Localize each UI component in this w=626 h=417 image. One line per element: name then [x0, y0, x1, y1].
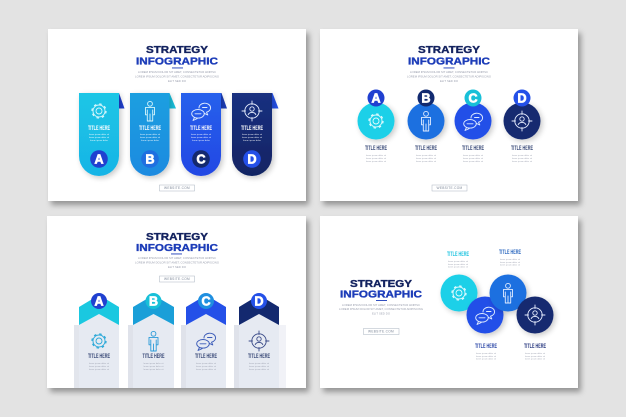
banner B title: lorem ipsum dolor: [141, 139, 159, 142]
label D: lorem ipsum dolor sit: [525, 352, 545, 355]
icon: target: [512, 111, 532, 131]
website button: WEBSITE.COM: [164, 186, 190, 190]
intro text: LOREM IPSUM DOLOR SIT AMET, CONSECTETUR ADIPISCING: [339, 307, 423, 311]
heading: INFOGRAPHIC: [340, 290, 422, 300]
column B title: [142, 354, 164, 371]
item A title: lorem ipsum dolor sit: [366, 160, 386, 163]
badge A: A: [94, 294, 104, 308]
intro text: ELIT SED DO: [168, 265, 187, 269]
label A: [447, 252, 469, 268]
label C: lorem ipsum dolor sit: [476, 358, 496, 360]
icon: chat bubbles: [197, 333, 216, 350]
item A title: TITLE HERE: [365, 146, 387, 152]
website button: WEBSITE.COM: [368, 330, 394, 334]
item B title: TITLE HERE: [415, 146, 437, 152]
item A title: lorem ipsum dolor sit: [366, 157, 386, 160]
badge A: A: [371, 92, 381, 106]
label A: lorem ipsum dolor sit: [448, 266, 468, 268]
heading: STRATEGY: [350, 279, 413, 290]
badge A: A: [94, 152, 104, 166]
item A: [358, 90, 394, 163]
panel: ribbon banners: [48, 29, 306, 201]
intro text: ELIT SED DO: [168, 79, 187, 83]
badge B: B: [421, 92, 431, 106]
heading: INFOGRAPHIC: [136, 56, 218, 68]
banner B: [130, 93, 176, 176]
column B title: lorem ipsum dolor sit: [144, 368, 164, 371]
icon: gear: [369, 114, 383, 128]
item B title: lorem ipsum dolor sit: [416, 160, 436, 163]
banner D title: lorem ipsum dolor: [243, 139, 261, 142]
banner D title: lorem ipsum dolor sit: [242, 133, 262, 136]
label B: [499, 250, 521, 266]
label D: lorem ipsum dolor sit: [525, 355, 545, 358]
heading: [136, 45, 218, 68]
item C title: lorem ipsum dolor sit: [463, 157, 483, 160]
banner C: [181, 93, 227, 176]
column C title: lorem ipsum dolor sit: [196, 362, 216, 365]
intro text: LOREM IPSUM DOLOR SIT AMET, CONSECTETUR ADIPISC: [342, 303, 420, 307]
circle C: [466, 296, 504, 334]
label B: TITLE HERE: [499, 250, 521, 256]
icon: chat bubbles: [464, 113, 483, 130]
item C: [454, 90, 492, 163]
column A title: lorem ipsum dolor sit: [89, 368, 109, 371]
column D title: lorem ipsum dolor sit: [249, 368, 269, 371]
intro text: [135, 256, 219, 269]
column B: [128, 293, 174, 388]
column A title: lorem ipsum dolor sit: [89, 365, 109, 368]
icon: person: [146, 101, 154, 121]
banner C title: [190, 126, 212, 142]
item C title: lorem ipsum dolor sit: [463, 160, 483, 163]
label C: lorem ipsum dolor sit: [476, 352, 496, 355]
label B: lorem ipsum dolor sit: [500, 261, 520, 264]
label D: TITLE HERE: [524, 344, 546, 350]
label A: lorem ipsum dolor sit: [448, 263, 468, 266]
banner A title: TITLE HERE: [88, 126, 110, 132]
panel: chevron columns: [47, 216, 306, 388]
panel: overlapping circles: [320, 216, 578, 388]
badge B: B: [145, 152, 155, 166]
banner D title: lorem ipsum dolor sit: [242, 136, 262, 139]
label C: lorem ipsum dolor sit: [476, 355, 496, 358]
intro text: LOREM IPSUM DOLOR SIT AMET, CONSECTETUR ADIPISCING: [407, 74, 491, 78]
circle D: [516, 296, 554, 334]
item B title: lorem ipsum dolor sit: [416, 154, 436, 157]
label B: lorem ipsum dolor sit: [500, 258, 520, 261]
heading: INFOGRAPHIC: [408, 56, 490, 68]
badge B: B: [149, 294, 158, 308]
label A: lorem ipsum dolor sit: [448, 260, 468, 263]
label B: lorem ipsum dolor sit: [500, 264, 520, 266]
banner D: [232, 93, 278, 176]
item A title: lorem ipsum dolor sit: [366, 154, 386, 157]
badge D: D: [254, 294, 264, 308]
icon: target: [249, 331, 269, 351]
item A title: [365, 146, 387, 163]
heading: STRATEGY: [146, 232, 209, 243]
intro text: LOREM IPSUM DOLOR SIT AMET, CONSECTETUR ADIPISC: [138, 256, 216, 260]
icon: gear: [92, 334, 106, 348]
website button: [160, 185, 194, 191]
intro text: ELIT SED DO: [440, 79, 459, 83]
column A title: [88, 354, 110, 371]
item D title: lorem ipsum dolor sit: [512, 157, 532, 160]
banner C title: lorem ipsum dolor sit: [191, 133, 211, 136]
label C: [475, 344, 497, 360]
column B title: lorem ipsum dolor sit: [144, 365, 164, 368]
circle B: [490, 274, 526, 312]
heading: STRATEGY: [418, 45, 481, 56]
column D: [234, 293, 286, 388]
label D: lorem ipsum dolor sit: [525, 358, 545, 360]
column A: [74, 293, 119, 388]
item B title: [415, 146, 437, 163]
icon: person: [422, 111, 430, 131]
column D title: lorem ipsum dolor sit: [249, 362, 269, 365]
website button: WEBSITE.COM: [164, 277, 190, 281]
icon: chat bubbles: [192, 103, 211, 120]
item B title: lorem ipsum dolor sit: [416, 157, 436, 160]
item C title: TITLE HERE: [462, 146, 484, 152]
heading: INFOGRAPHIC: [136, 243, 218, 254]
website button: WEBSITE.COM: [437, 186, 463, 190]
website button: [432, 185, 467, 191]
banner C title: lorem ipsum dolor sit: [191, 136, 211, 139]
banner B title: lorem ipsum dolor sit: [140, 133, 160, 136]
circle A: [440, 274, 478, 312]
intro text: LOREM IPSUM DOLOR SIT AMET, CONSECTETUR ADIPISCING: [135, 74, 219, 78]
label A: TITLE HERE: [447, 252, 469, 258]
label C: TITLE HERE: [475, 344, 497, 350]
heading: [340, 279, 422, 301]
column C title: lorem ipsum dolor sit: [196, 365, 216, 368]
icon: gear: [92, 104, 106, 118]
banner A title: lorem ipsum dolor: [90, 139, 108, 142]
column C title: lorem ipsum dolor sit: [196, 368, 216, 371]
column A title: TITLE HERE: [88, 354, 110, 360]
icon: target: [525, 305, 545, 325]
column C title: [195, 354, 217, 371]
item D title: lorem ipsum dolor sit: [512, 160, 532, 163]
intro text: LOREM IPSUM DOLOR SIT AMET, CONSECTETUR ADIPISC: [410, 70, 488, 74]
column C: [181, 293, 226, 388]
icon: target: [242, 101, 262, 121]
intro text: LOREM IPSUM DOLOR SIT AMET, CONSECTETUR ADIPISCING: [135, 260, 219, 264]
banner C title: lorem ipsum dolor: [192, 139, 210, 142]
banner A title: [88, 126, 110, 142]
column B title: lorem ipsum dolor sit: [144, 362, 164, 365]
icon: person: [149, 331, 158, 351]
banner C title: TITLE HERE: [190, 126, 212, 132]
banner A title: lorem ipsum dolor sit: [89, 133, 109, 136]
website button: [160, 276, 194, 282]
badge C: C: [196, 152, 206, 166]
item B: [408, 90, 444, 163]
icon: person: [504, 283, 512, 303]
banner D title: TITLE HERE: [241, 126, 263, 132]
banner A title: lorem ipsum dolor sit: [89, 136, 109, 139]
intro text: LOREM IPSUM DOLOR SIT AMET, CONSECTETUR ADIPISC: [138, 70, 216, 74]
panel: circles with badges: [320, 29, 578, 201]
column D title: lorem ipsum dolor sit: [249, 365, 269, 368]
label D: [524, 344, 546, 360]
intro text: [407, 70, 491, 83]
item C title: lorem ipsum dolor sit: [463, 154, 483, 157]
column A title: lorem ipsum dolor sit: [89, 362, 109, 365]
badge C: C: [201, 294, 211, 308]
banner B title: lorem ipsum dolor sit: [140, 136, 160, 139]
item D title: [511, 146, 533, 163]
icon: chat bubbles: [476, 307, 495, 324]
item D title: lorem ipsum dolor sit: [512, 154, 532, 157]
badge C: C: [468, 92, 478, 106]
column C title: TITLE HERE: [195, 354, 217, 360]
icon: gear: [452, 286, 466, 300]
banner D title: [241, 126, 263, 142]
column D title: [248, 354, 270, 371]
badge D: D: [517, 92, 527, 106]
intro text: ELIT SED DO: [372, 312, 391, 316]
banner A: [79, 93, 124, 176]
item D: [504, 90, 540, 163]
column B title: TITLE HERE: [142, 354, 164, 360]
item D title: TITLE HERE: [511, 146, 533, 152]
website button: [364, 328, 399, 334]
badge D: D: [247, 152, 257, 166]
intro text: [339, 303, 423, 316]
heading: [136, 232, 218, 254]
item C title: [462, 146, 484, 163]
intro text: [135, 70, 219, 83]
column D title: TITLE HERE: [248, 354, 270, 360]
banner B title: TITLE HERE: [139, 126, 161, 132]
banner B title: [139, 126, 161, 142]
heading: STRATEGY: [146, 45, 209, 56]
heading: [408, 45, 490, 68]
